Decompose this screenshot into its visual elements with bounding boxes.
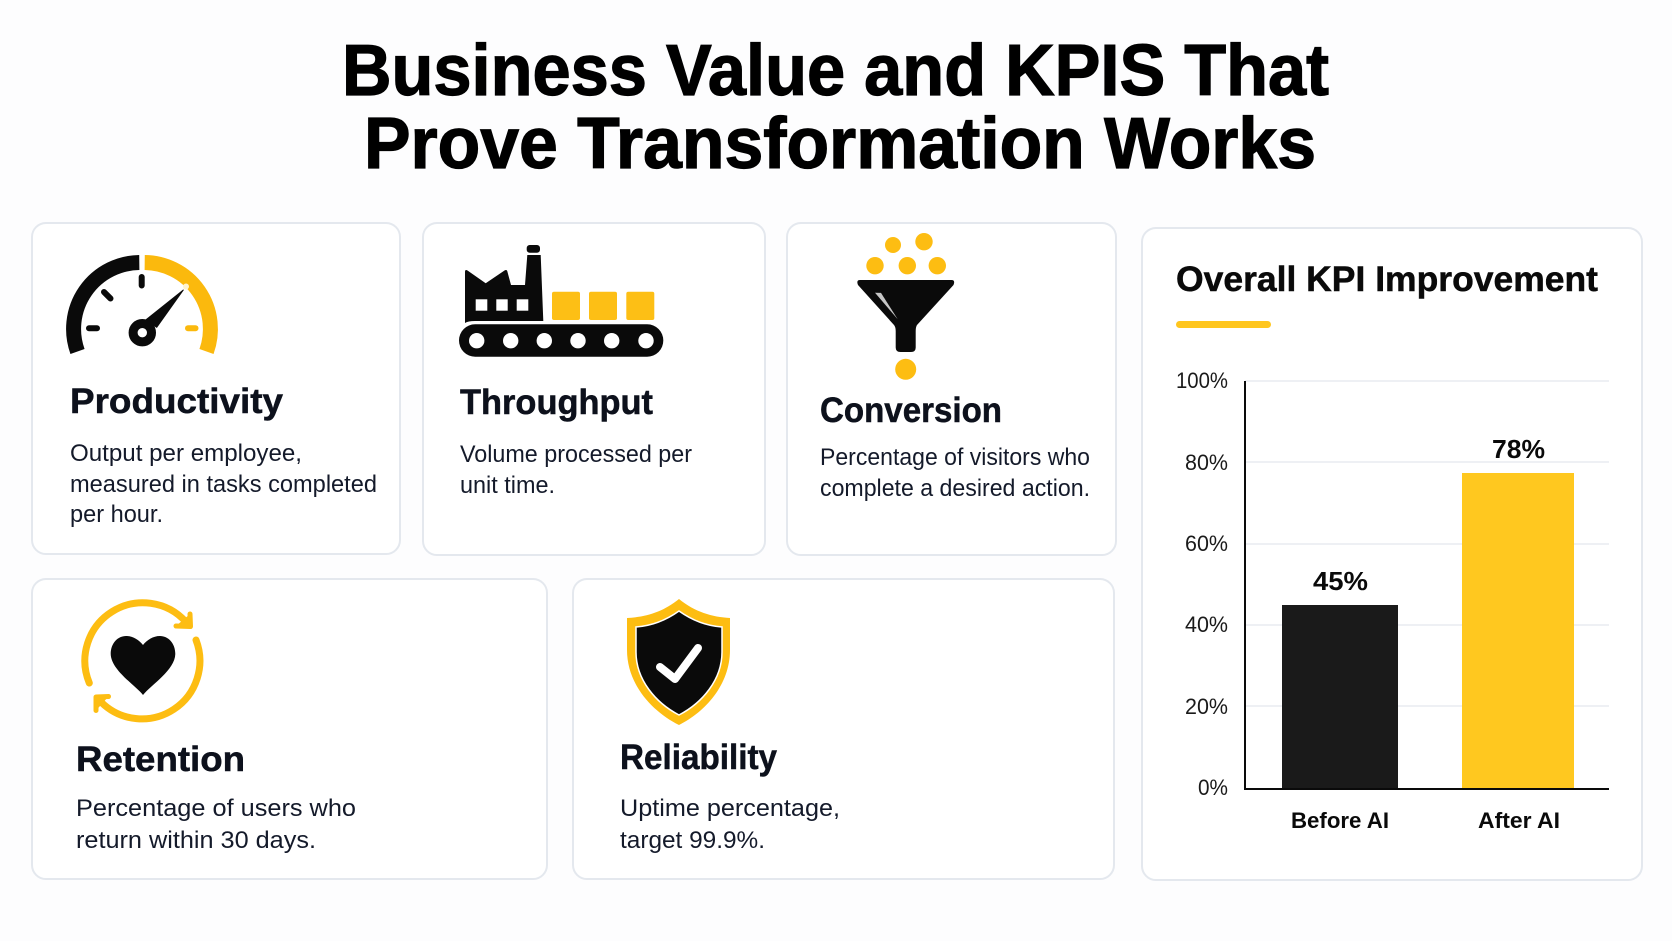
text: throughput description xyxy=(460,441,692,499)
icon: speedometer gauge xyxy=(74,262,210,352)
icon: factory with conveyor xyxy=(459,245,663,357)
category label: before AI: Before AI xyxy=(1291,808,1389,833)
text: retention description: return within 30 days. xyxy=(76,827,316,854)
panel: conversion xyxy=(787,223,1116,555)
panel: productivity xyxy=(32,223,400,554)
title: Prove Transformation Works xyxy=(364,104,1316,184)
heading: productivity: Productivity xyxy=(70,382,284,421)
axes xyxy=(1245,381,1609,789)
icon: heart with circular arrows xyxy=(85,603,200,719)
y-axis labels: 40% xyxy=(1185,612,1228,637)
text: productivity description: per hour. xyxy=(70,501,163,528)
text: productivity description: Output per employee, xyxy=(70,440,302,467)
text: reliability description: target 99.9%. xyxy=(620,827,765,854)
value: 78%: 78% xyxy=(1492,434,1545,464)
y-axis labels: 0% xyxy=(1198,775,1228,800)
panel: reliability xyxy=(573,579,1114,879)
heading: retention: Retention xyxy=(76,740,245,779)
panel: throughput xyxy=(423,223,765,555)
text: retention description xyxy=(76,795,356,854)
value: 45%: 45% xyxy=(1313,566,1368,596)
heading: throughput: Throughput xyxy=(460,383,653,422)
title xyxy=(342,31,1329,184)
category label: after AI: After AI xyxy=(1478,808,1560,833)
title: Business Value and KPIS That xyxy=(342,31,1329,111)
text: conversion description: complete a desired action. xyxy=(820,475,1090,502)
y-axis labels xyxy=(1176,368,1228,800)
bar chart xyxy=(1176,368,1609,833)
panel: overall KPI improvement chart xyxy=(1142,228,1642,880)
heading: reliability: Reliability xyxy=(620,738,778,777)
icon: shield with check xyxy=(627,599,730,725)
y-axis labels: 20% xyxy=(1185,694,1228,719)
icon: funnel with dots xyxy=(857,233,954,380)
bar: after AI xyxy=(1462,473,1574,789)
panel: retention xyxy=(32,579,547,879)
text: reliability description: Uptime percentage, xyxy=(620,795,840,822)
y-axis labels: 80% xyxy=(1185,450,1228,475)
text: productivity description: measured in tasks completed xyxy=(70,471,377,498)
text: productivity description xyxy=(70,440,377,528)
accent underline xyxy=(1176,321,1271,328)
y-axis labels: 60% xyxy=(1185,531,1228,556)
heading: chart title: Overall KPI Improvement xyxy=(1176,260,1598,299)
bar: before AI xyxy=(1282,605,1398,789)
text: reliability description xyxy=(620,795,840,854)
text: conversion description xyxy=(820,444,1090,502)
text: retention description: Percentage of users who xyxy=(76,795,356,822)
y-axis labels: 100% xyxy=(1176,368,1228,393)
text: conversion description: Percentage of visitors who xyxy=(820,444,1090,471)
text: throughput description: Volume processed per xyxy=(460,441,692,468)
text: throughput description: unit time. xyxy=(460,472,555,499)
heading: conversion: Conversion xyxy=(820,391,1002,430)
